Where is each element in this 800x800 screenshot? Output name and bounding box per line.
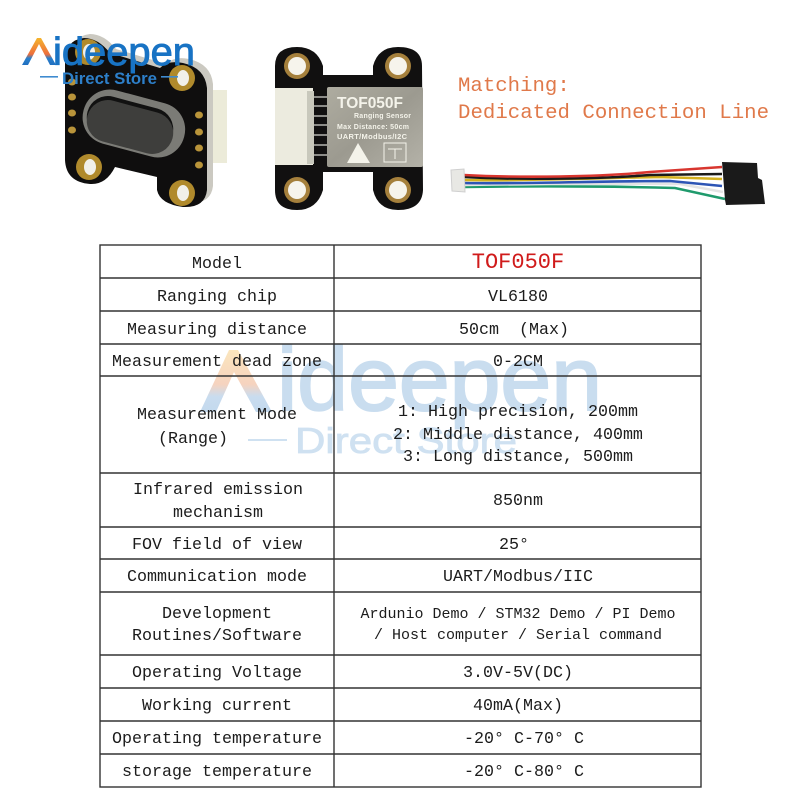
row: communication — [127, 568, 593, 587]
row: infrared emission — [133, 481, 543, 523]
row: operating voltage — [132, 664, 573, 683]
sensor module, lens side — [65, 34, 227, 207]
row: infrared emission: mechanism — [173, 504, 263, 523]
heading: matching cable — [458, 75, 769, 125]
row: dead zone: Measurement dead zone — [112, 353, 322, 372]
row: FOV: FOV field of view — [132, 536, 302, 555]
row: measurement mode — [137, 403, 643, 467]
row: measurement mode: (Range) — [158, 430, 228, 449]
watermark — [200, 330, 602, 461]
cable with connectors — [451, 162, 765, 205]
heading: matching cable: Dedicated Connection Line — [458, 102, 769, 125]
row: working current: Working current — [142, 697, 292, 716]
row: measurement mode: Measurement Mode — [137, 406, 297, 425]
row: measurement mode: 1: High precision, 200mm — [398, 403, 638, 422]
shield markings — [337, 95, 411, 163]
row: ranging chip: Ranging chip — [157, 288, 277, 307]
logo: Aideepen Direct Store: ideepen — [53, 31, 195, 74]
row: FOV — [132, 536, 529, 555]
row: development: / Host computer / Serial command — [374, 627, 662, 644]
row: measuring distance — [127, 321, 569, 340]
row: storage temperature: -20° C-80° C — [464, 763, 584, 782]
row: measuring distance: Measuring distance — [127, 321, 307, 340]
row: ranging chip: VL6180 — [488, 288, 548, 307]
row: infrared emission: 850nm — [493, 492, 543, 511]
row: storage temperature — [122, 763, 584, 782]
sensor module, component side — [275, 47, 423, 210]
row: operating temperature: -20° C-70° C — [464, 730, 584, 749]
logo: Aideepen Direct Store — [22, 31, 195, 88]
heading: matching cable: Matching: — [458, 75, 570, 98]
row: operating voltage: Operating Voltage — [132, 664, 302, 683]
row: development: Development — [162, 605, 272, 624]
row: measuring distance: 50cm (Max) — [459, 321, 569, 340]
row: development: Ardunio Demo / STM32 Demo / PI Demo — [360, 606, 676, 623]
row: development — [132, 605, 676, 646]
shield markings: Ranging Sensor — [354, 113, 411, 120]
row: FOV: 25° — [499, 536, 529, 555]
row: working current — [142, 697, 563, 716]
shield markings: UART/Modbus/I2C — [337, 132, 408, 141]
table grid — [100, 245, 701, 787]
row: development: Routines/Software — [132, 627, 302, 646]
row: model: TOF050F — [472, 250, 564, 275]
row: dead zone: 0-2CM — [493, 353, 543, 372]
spec table — [100, 245, 701, 787]
watermark: Direct Store — [295, 420, 517, 461]
row: measurement mode: 2: Middle distance, 400mm — [393, 426, 643, 445]
row: dead zone — [112, 353, 543, 372]
shield markings: Max Distance: 50cm — [337, 124, 409, 131]
row: communication: UART/Modbus/IIC — [443, 568, 593, 587]
shield markings: TOF050F — [337, 95, 403, 112]
row: ranging chip — [157, 288, 548, 307]
logo: Aideepen Direct Store: Direct Store — [62, 69, 157, 88]
row: operating temperature — [112, 730, 584, 749]
row: model: Model — [192, 255, 242, 274]
row: communication: Communication mode — [127, 568, 307, 587]
row: working current: 40mA(Max) — [473, 697, 563, 716]
row: storage temperature: storage temperature — [122, 763, 312, 782]
watermark: ideepen — [277, 330, 602, 430]
row: infrared emission: Infrared emission — [133, 481, 303, 500]
row: model — [192, 250, 564, 275]
row: operating temperature: Operating temperature — [112, 730, 322, 749]
row: measurement mode: 3: Long distance, 500mm — [403, 448, 633, 467]
row: operating voltage: 3.0V-5V(DC) — [463, 664, 573, 683]
